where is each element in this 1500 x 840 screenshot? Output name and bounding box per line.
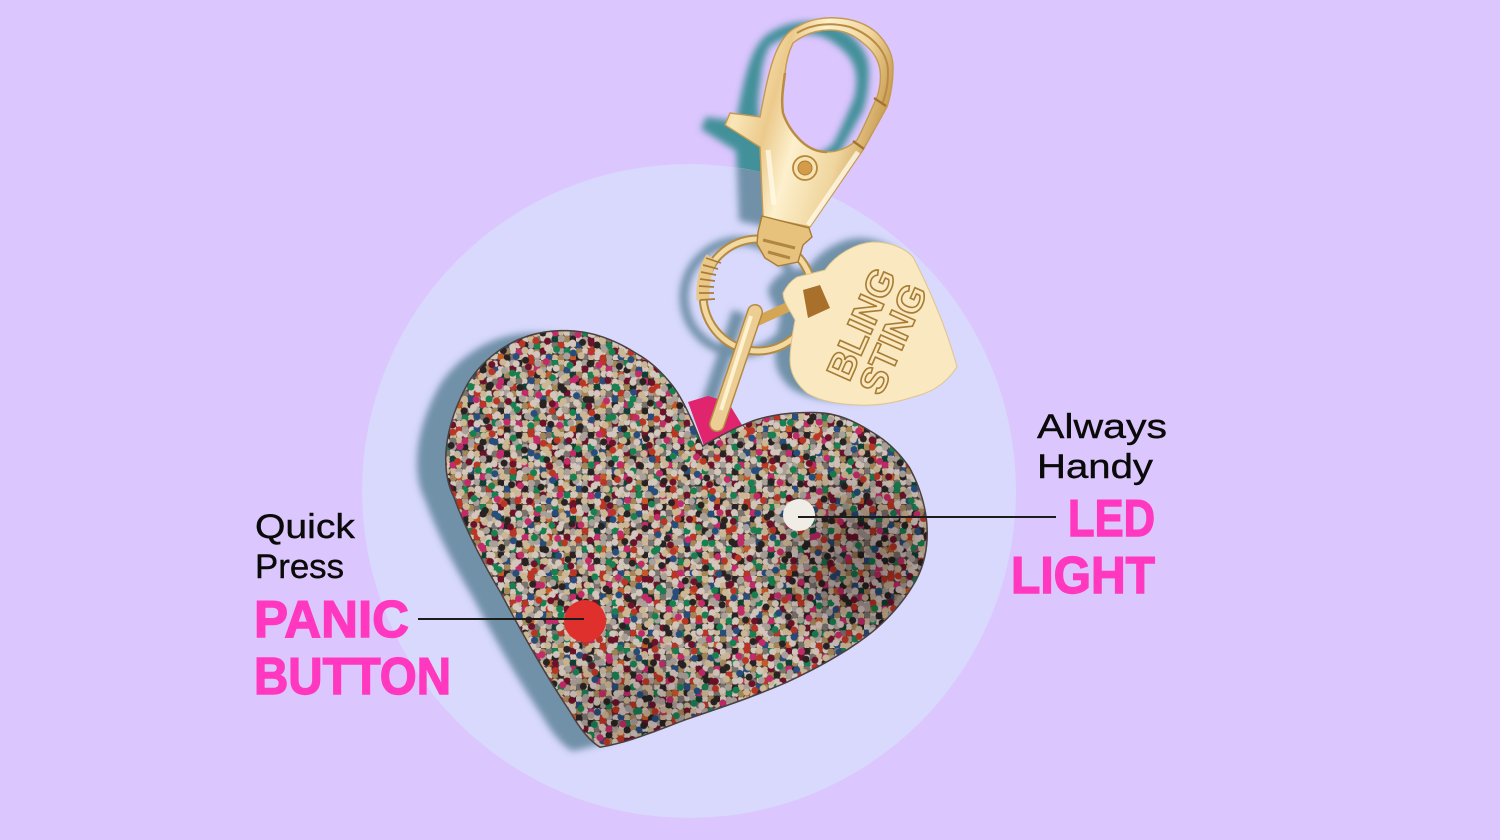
- engraved brand text: BLING: [819, 262, 904, 386]
- glitter shading: [560, 490, 930, 740]
- glitter layer one: [446, 331, 926, 746]
- drop shadow on circle: [412, 167, 896, 755]
- lobster clasp: [725, 18, 893, 266]
- heading: LED light: LED: [1068, 490, 1155, 548]
- glitter base: [448, 334, 926, 744]
- heading: LED light: LIGHT: [1011, 547, 1155, 605]
- pale blue circle: [362, 164, 1016, 818]
- infographic canvas: [256, 16, 1166, 818]
- clasp neck: [757, 216, 812, 266]
- heading: panic button: [254, 591, 451, 706]
- leader line: panic button: [418, 618, 584, 620]
- panic button red dot: [564, 600, 606, 642]
- glitter overall tone: [446, 331, 926, 746]
- leader line: LED: [798, 516, 1056, 518]
- heart charm tag: STING: [851, 278, 935, 400]
- label: quick press: Quick: [255, 508, 356, 546]
- callout: LED light: [798, 408, 1167, 605]
- heading: panic button: PANIC: [254, 591, 409, 649]
- tag hole: [803, 285, 830, 318]
- callout: panic button: [254, 508, 584, 706]
- label: always handy: Always: [1037, 408, 1167, 446]
- label: always handy: [1037, 408, 1167, 486]
- heading: LED light: [1011, 490, 1155, 605]
- pink tab: [688, 396, 742, 446]
- label: quick press: [255, 508, 356, 586]
- keychain illustration: [430, 18, 957, 760]
- drop shadow on lilac background: [417, 22, 942, 751]
- LED white dot: [783, 499, 815, 531]
- split ring: [717, 312, 755, 424]
- heading: panic button: BUTTON: [254, 648, 451, 706]
- heart charm tag: [755, 242, 957, 405]
- gold key ring: [699, 239, 813, 351]
- glitter layer two: [446, 332, 926, 746]
- label: quick press: Press: [255, 548, 344, 586]
- clasp rivet: [793, 156, 817, 180]
- label: always handy: Handy: [1037, 448, 1153, 486]
- glitter heart: [430, 320, 940, 760]
